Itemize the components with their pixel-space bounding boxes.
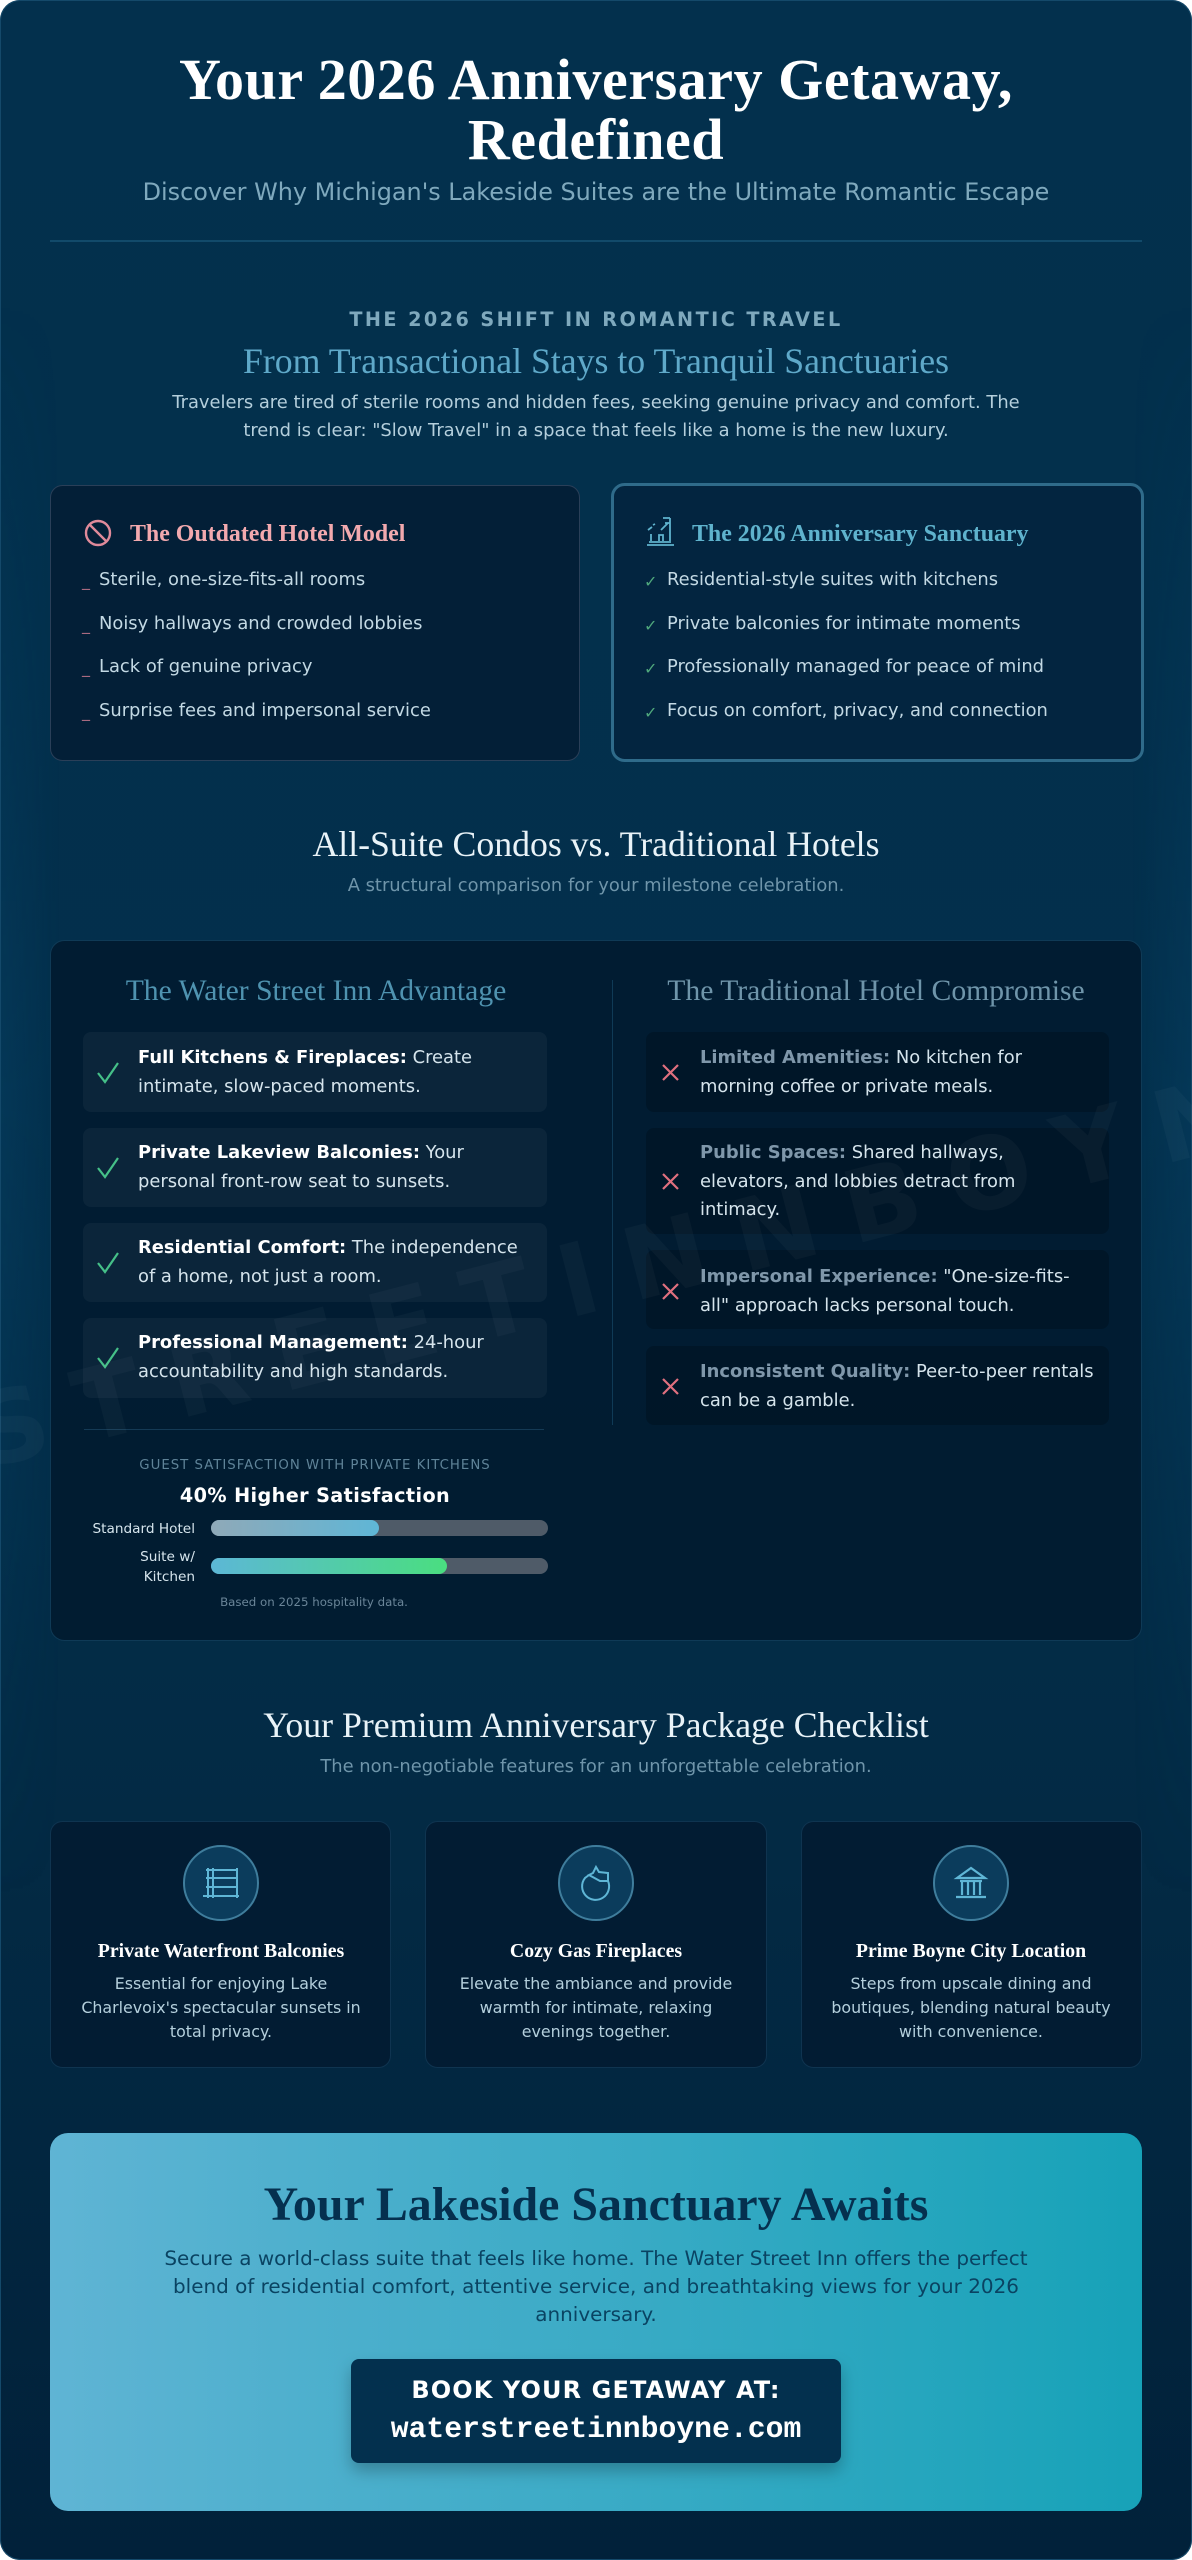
icon: flame: [559, 1846, 633, 1920]
list: _: [81, 571, 91, 591]
section heading: package checklist: [263, 1705, 929, 1777]
panel: outdated hotel model: [50, 486, 580, 760]
bar: suite with kitchen: Kitchen: [144, 1569, 195, 1585]
list: [81, 569, 431, 722]
card text: evenings together.: [522, 2022, 670, 2041]
card title: Private Waterfront Balconies: [98, 1940, 345, 1962]
row: limited amenities: Limited Amenities: No kitchen for: [700, 1047, 1023, 1068]
row: residential comfort: [83, 1223, 547, 1302]
list: ✓: [644, 616, 657, 635]
header: [143, 47, 1049, 206]
list: Surprise fees and impersonal service: [99, 700, 431, 721]
row: residential comfort: of a home, not just a room.: [138, 1266, 382, 1287]
list: Residential-style suites with kitchens: [667, 569, 998, 590]
intro paragraph: trend is clear: "Slow Travel" in a space that feels like a home is the new luxury.: [243, 420, 949, 441]
row: kitchens: [83, 1032, 547, 1112]
section: romantic travel shift: [171, 308, 1020, 441]
cta text: Secure a world-class suite that feels like home. The Water Street Inn offers the perfect: [164, 2246, 1028, 2270]
column: traditional hotel compromise: [646, 975, 1109, 1425]
card text: Essential for enjoying Lake: [115, 1974, 327, 1993]
row: professional management: [83, 1318, 547, 1398]
column heading: The Traditional Hotel Compromise: [667, 975, 1085, 1007]
intro paragraph: [171, 392, 1020, 441]
row: limited amenities: morning coffee or private meals.: [700, 1076, 993, 1097]
row: impersonal experience: all" approach lacks personal touch.: [700, 1295, 1014, 1316]
subtitle: Discover Why Michigan's Lakeside Suites are the Ultimate Romantic Escape: [143, 178, 1049, 206]
chart: guest satisfaction: [92, 1458, 548, 1609]
row: balconies: Private Lakeview Balconies: Your: [138, 1142, 465, 1163]
row: professional management: Professional Management: 24-hour: [138, 1332, 484, 1353]
kicker: THE 2026 SHIFT IN ROMANTIC TRAVEL: [349, 308, 843, 331]
icon: prohibited: [86, 521, 110, 545]
icon: landmark: [934, 1846, 1008, 1920]
card text: Charlevoix's spectacular sunsets in: [81, 1998, 361, 2017]
row: balconies: personal front-row seat to sunsets.: [138, 1171, 450, 1192]
section heading: package checklist: Your Premium Anniversary Package Checklist: [263, 1705, 929, 1745]
row: balconies: [83, 1128, 547, 1207]
row: impersonal experience: [646, 1250, 1109, 1329]
icon: balcony: [184, 1846, 258, 1920]
card text: [831, 1974, 1111, 2041]
list: ✓: [644, 572, 657, 591]
row: inconsistent quality: Inconsistent Quality: Peer-to-peer rentals: [700, 1361, 1094, 1382]
intro paragraph: Travelers are tired of sterile rooms and hidden fees, seeking genuine privacy and comfort. The: [171, 392, 1020, 413]
card text: [460, 1974, 732, 2041]
card title: Cozy Gas Fireplaces: [510, 1940, 682, 1962]
panel: call to action: [50, 2133, 1142, 2511]
button: BOOK YOUR GETAWAY AT:: [411, 2376, 781, 2404]
chart label: GUEST SATISFACTION WITH PRIVATE KITCHENS: [139, 1458, 491, 1473]
section subheading: A structural comparison for your milestone celebration.: [348, 875, 844, 896]
row: public spaces: elevators, and lobbies detract from: [700, 1171, 1015, 1192]
list: _: [81, 615, 91, 635]
list: Private balconies for intimate moments: [667, 613, 1021, 634]
card text: Steps from upscale dining and: [850, 1974, 1092, 1993]
row: kitchens: intimate, slow-paced moments.: [138, 1076, 421, 1097]
row: inconsistent quality: [646, 1346, 1109, 1425]
cta text: [164, 2246, 1028, 2326]
card text: Elevate the ambiance and provide: [460, 1974, 732, 1993]
row: public spaces: Public Spaces: Shared hallways,: [700, 1142, 1004, 1163]
card text: boutiques, blending natural beauty: [831, 1998, 1111, 2017]
bar: suite with kitchen: Suite w/: [140, 1549, 195, 1565]
card: gas fireplaces: [426, 1822, 766, 2068]
list: Professionally managed for peace of mind: [667, 656, 1044, 677]
list: ✓: [644, 659, 657, 678]
list: Focus on comfort, privacy, and connection: [667, 700, 1048, 721]
title: [179, 47, 1013, 172]
card: boyne city location: [802, 1822, 1142, 2068]
list: ✓: [644, 703, 657, 722]
card text: with convenience.: [899, 2022, 1043, 2041]
section heading: From Transactional Stays to Tranquil Sanctuaries: [243, 341, 949, 381]
row: public spaces: [646, 1128, 1109, 1234]
row: public spaces: intimacy.: [700, 1199, 780, 1220]
row: inconsistent quality: can be a gamble.: [700, 1390, 855, 1411]
list: _: [81, 702, 91, 722]
chart headline: 40% Higher Satisfaction: [180, 1484, 450, 1507]
list: Lack of genuine privacy: [99, 656, 313, 677]
row: impersonal experience: Impersonal Experience: "One-size-fits-: [700, 1266, 1070, 1287]
panel heading: The 2026 Anniversary Sanctuary: [692, 521, 1029, 547]
row: residential comfort: Residential Comfort: The independence: [138, 1237, 518, 1258]
row: kitchens: Full Kitchens & Fireplaces: Create: [138, 1047, 472, 1068]
column heading: The Water Street Inn Advantage: [126, 975, 506, 1007]
button: waterstreetinnboyne.com: [391, 2412, 801, 2446]
panel heading: The Outdated Hotel Model: [130, 521, 406, 547]
cta text: blend of residential comfort, attentive service, and breathtaking views for your 2026: [173, 2274, 1019, 2298]
section heading: comparison: All-Suite Condos vs. Traditional Hotels: [312, 824, 880, 864]
chart footnote: Based on 2025 hospitality data.: [220, 1595, 408, 1609]
card title: Prime Boyne City Location: [856, 1940, 1086, 1962]
column: water street inn advantage: [83, 975, 547, 1398]
bar: standard hotel: [92, 1520, 548, 1537]
cta heading: Your Lakeside Sanctuary Awaits: [264, 2178, 928, 2231]
card text: warmth for intimate, relaxing: [480, 1998, 712, 2017]
panel: 2026 anniversary sanctuary: [612, 484, 1142, 760]
section heading: comparison: [312, 824, 880, 896]
card text: [81, 1974, 361, 2041]
button: [351, 2359, 841, 2471]
section subheading: The non-negotiable features for an unforgettable celebration.: [319, 1756, 872, 1777]
icon: sanctuary: [647, 518, 674, 545]
bar: standard hotel: Standard Hotel: [92, 1521, 195, 1537]
card text: total privacy.: [170, 2022, 272, 2041]
row: limited amenities: [646, 1032, 1109, 1112]
bar: suite with kitchen: [140, 1549, 548, 1585]
title: Redefined: [468, 107, 724, 172]
card: waterfront balconies: [50, 1822, 390, 2068]
cta text: anniversary.: [535, 2302, 657, 2326]
title: Your 2026 Anniversary Getaway,: [179, 47, 1013, 112]
panel: comparison: [50, 940, 1142, 1640]
list: _: [81, 658, 91, 678]
list: Sterile, one-size-fits-all rooms: [99, 569, 365, 590]
list: Noisy hallways and crowded lobbies: [99, 613, 422, 634]
row: professional management: accountability and high standards.: [138, 1361, 448, 1382]
list: [644, 569, 1048, 722]
